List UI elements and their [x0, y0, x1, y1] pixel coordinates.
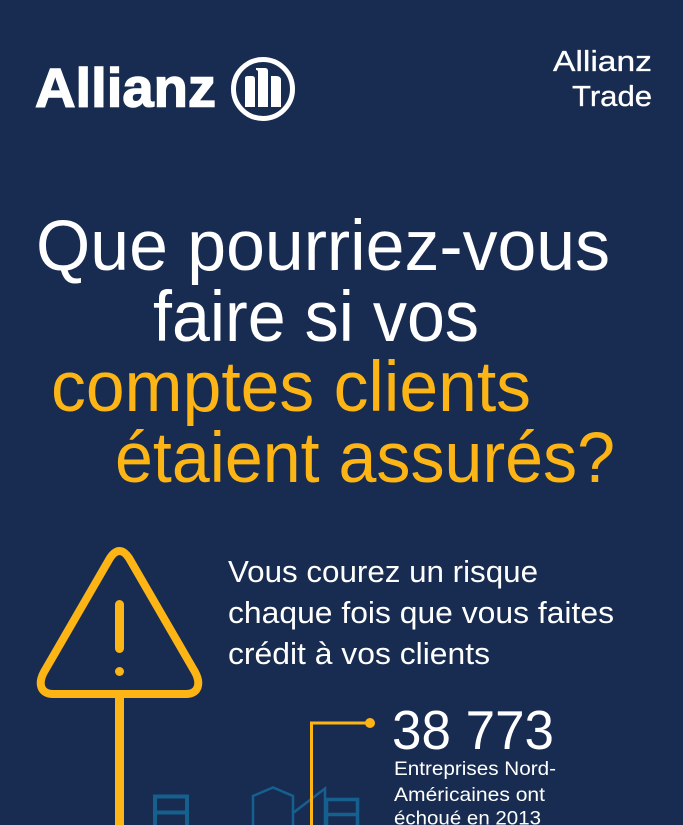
brand label: Allianz Trade: Allianz — [553, 46, 652, 78]
title — [36, 207, 615, 498]
risk statement — [228, 554, 614, 671]
statistic: 38 773: 38 773 — [392, 699, 554, 761]
risk statement: crédit à vos clients — [228, 636, 490, 671]
callout connector — [312, 718, 375, 825]
title: faire si vos — [153, 278, 479, 357]
risk statement: chaque fois que vous faites — [228, 595, 614, 630]
statistic description: Entreprises Nord- — [394, 758, 556, 780]
buildings illustration — [155, 788, 358, 825]
logo emblem — [234, 60, 292, 118]
title: Que pourriez-vous — [36, 207, 610, 286]
icon: warning sign — [41, 551, 198, 825]
title: étaient assurés? — [115, 419, 615, 498]
logo wordmark: Allianz — [35, 56, 216, 118]
statistic description — [394, 758, 556, 825]
logo: Allianz — [35, 56, 292, 118]
brand label: Allianz Trade: Trade — [572, 81, 652, 113]
statistic description: Américaines ont — [394, 784, 546, 806]
brand label: Allianz Trade — [553, 46, 652, 113]
title: comptes clients — [51, 348, 531, 427]
risk statement: Vous courez un risque — [228, 554, 538, 589]
